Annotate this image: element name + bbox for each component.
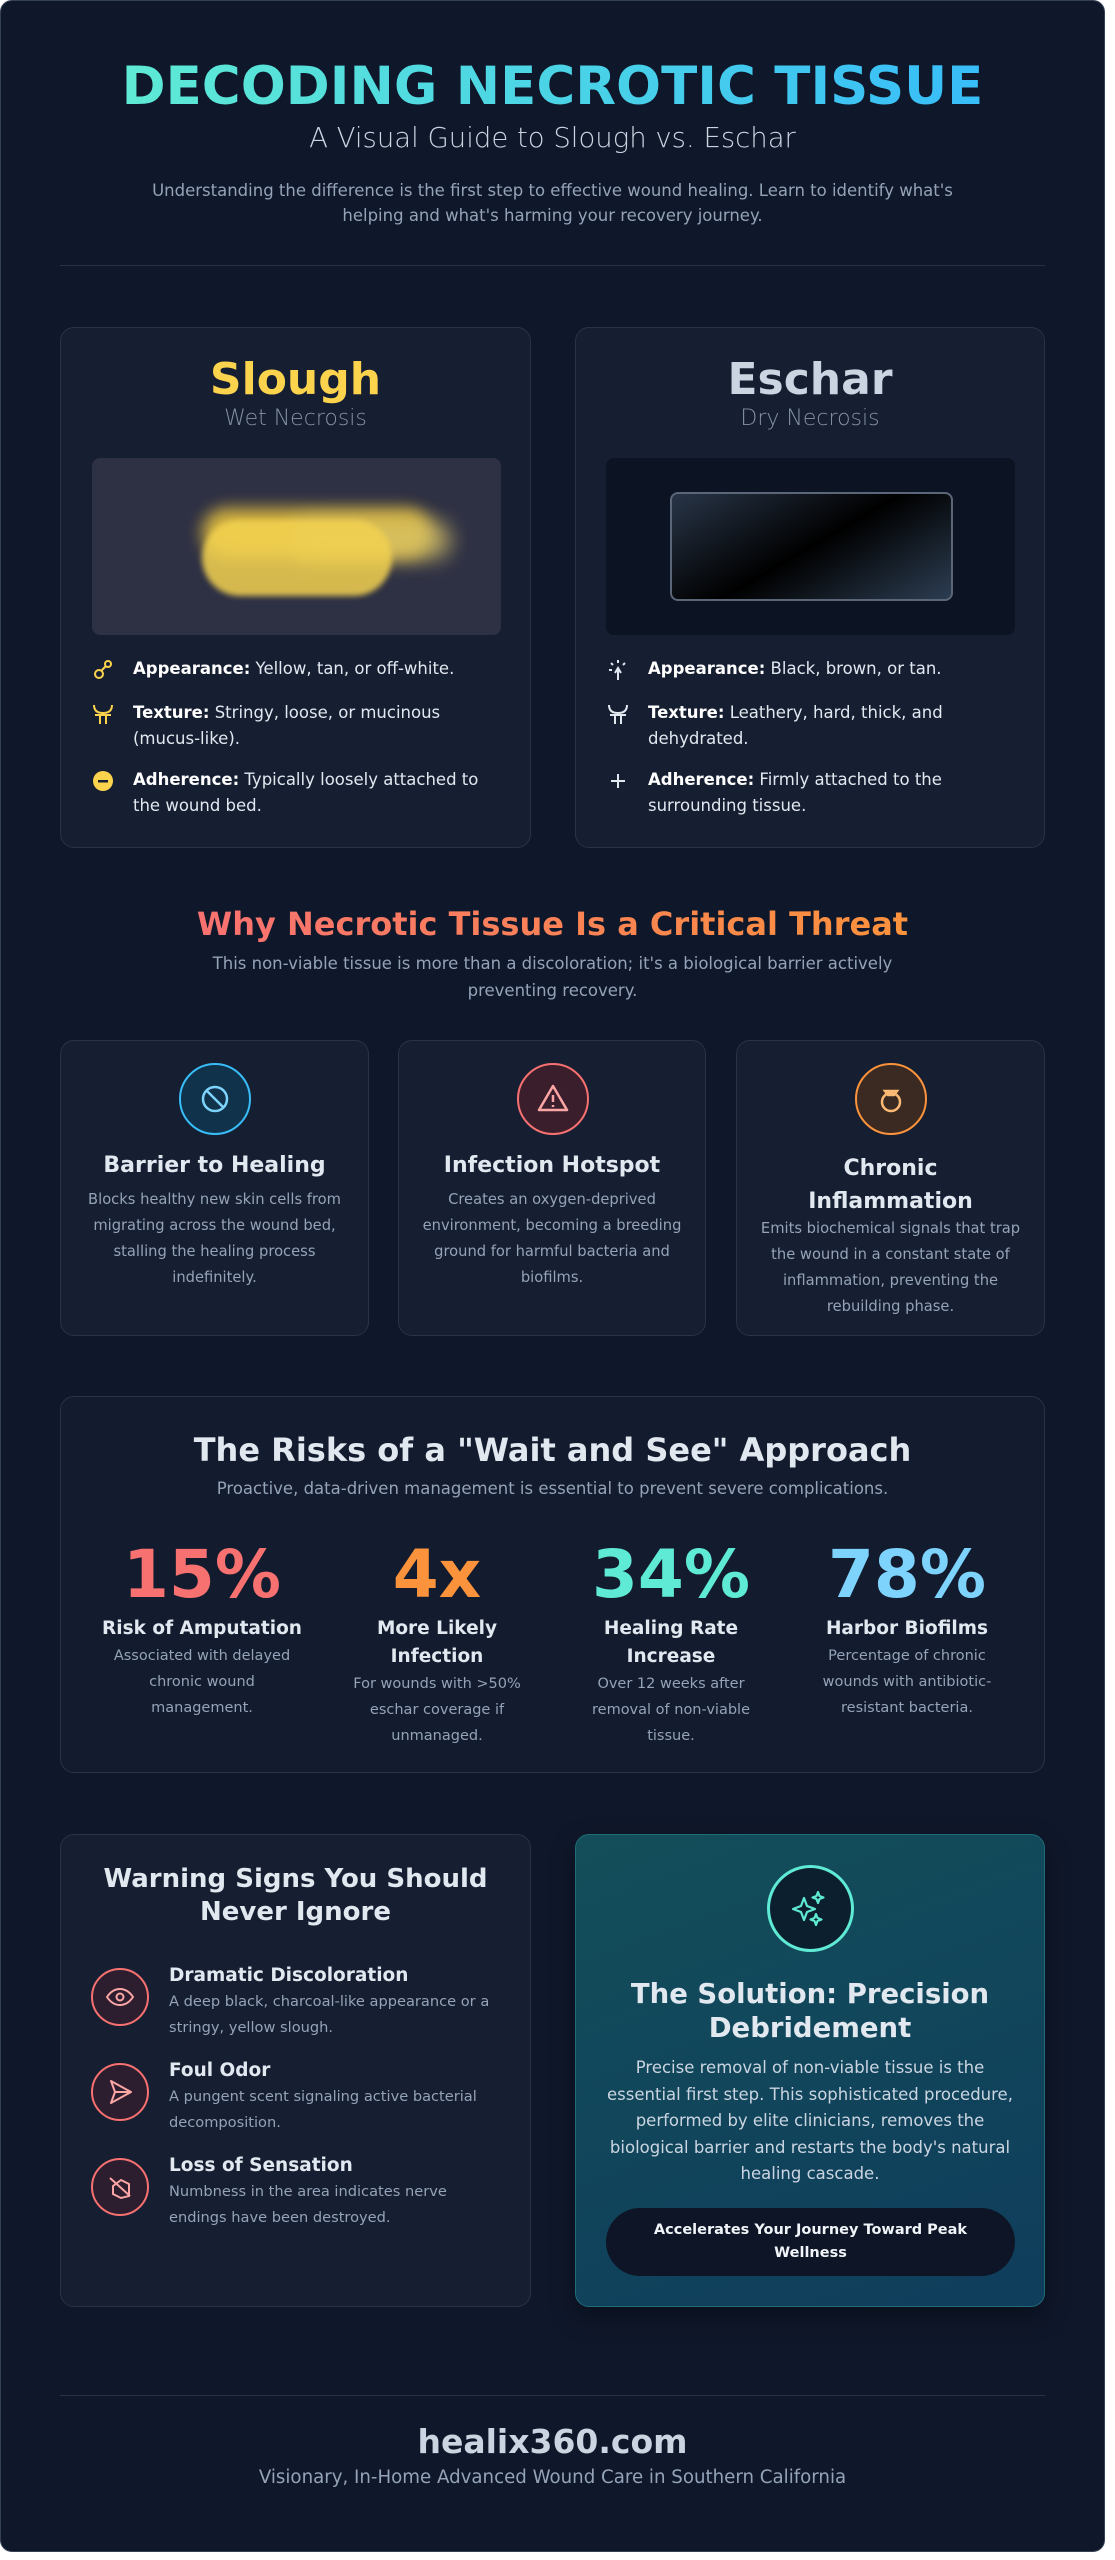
subheading: wet necrosis: Wet Necrosis [224,406,367,431]
risks heading: The Risks of a "Wait and See" Approach [194,1431,911,1469]
panel: slough [60,327,531,848]
icon: blocked [179,1063,251,1135]
warning heading: Never Ignore [200,1897,391,1927]
icon: flame [855,1063,927,1135]
card text: Emits biochemical signals that trap the wound in a constant state of inflammation, preventing the rebuilding phase. [761,1220,1020,1315]
stat: 34% [592,1536,750,1744]
sign: discoloration: Dramatic Discoloration [169,1965,408,1986]
illustration: eschar [606,458,1015,635]
item: texture: Texture: Leathery, hard, thick, and dehydrated. [648,703,943,748]
subheading: dry necrosis: Dry Necrosis [740,406,880,431]
panel: infection hotspot [398,1040,706,1336]
panel: chronic inflammation [736,1040,1045,1336]
warning heading: Warning Signs You Should [104,1864,488,1894]
card title: Chronic [843,1156,938,1181]
card text: Creates an oxygen-deprived environment, becoming a breeding ground for harmful bacteria and biofilms. [423,1191,681,1286]
heading: critical threat: Why Necrotic Tissue Is a Critical Threat [197,905,908,943]
item: adherence: Adherence: Typically loosely attached to the wound bed. [133,770,478,815]
panel: warning signs [60,1834,531,2307]
sign: foul odor: Foul Odor [169,2060,270,2081]
stat: 15% [102,1536,302,1716]
stat: 4x: 4x [393,1536,481,1613]
sign: foul odor: A pungent scent signaling active bacterial decomposition. [169,2088,477,2131]
intro text: Understanding the difference is the first step to effective wound healing. Learn to identify what's helping and what's harming your recovery journey. [152,181,953,225]
title: DECODING NECROTIC TISSUE [122,56,983,117]
stat: 34%: 34% [592,1536,750,1613]
threat subtitle: This non-viable tissue is more than a discoloration; it's a biological barrier actively preventing recovery. [213,954,892,1000]
button: accelerates [606,2208,1015,2276]
sign: loss of sensation: Numbness in the area indicates nerve endings have been destroyed. [169,2183,447,2226]
stat: 34%: Healing Rate Increase [604,1618,738,1667]
card title: Barrier to Healing [103,1153,326,1178]
sign: discoloration [91,1965,489,2036]
heading: eschar: Eschar [727,354,893,405]
solution heading: Debridement [709,2012,911,2044]
card title [808,1156,973,1214]
solution text: Precise removal of non-viable tissue is the essential first step. This sophisticated procedure, performed by elite clinicians, removes the biological barrier and restarts the body's natural healing cascade. [607,2058,1013,2183]
card title: Infection Hotspot [444,1153,660,1178]
stat: 78%: Percentage of chronic wounds with antibiotic-resistant bacteria. [823,1648,991,1716]
heading: slough: Slough [210,354,381,405]
sign: loss of sensation: Loss of Sensation [169,2155,353,2176]
item: texture: Texture: Stringy, loose, or mucinous (mucus-like). [133,703,440,748]
button: accelerates: Wellness [774,2245,847,2261]
stat: 15%: Risk of Amputation [102,1618,302,1639]
sign: foul odor [91,2060,477,2131]
panel: solution [575,1834,1045,2307]
solution heading: The Solution: Precision [631,1978,989,2010]
item: adherence: Adherence: Firmly attached to the surrounding tissue. [648,770,942,815]
stat: 15%: 15% [123,1536,281,1613]
panel: barrier to healing [60,1040,369,1336]
subtitle: A Visual Guide to Slough vs. Eschar [309,122,796,154]
risks subtitle: Proactive, data-driven management is essential to prevent severe complications. [217,1479,888,1498]
stat: 78% [823,1536,991,1716]
illustration: slough [92,458,501,635]
card text: Blocks healthy new skin cells from migrating across the wound bed, stalling the healing process indefinitely. [88,1191,341,1286]
panel: risks [60,1396,1045,1773]
sign: discoloration: A deep black, charcoal-like appearance or a stringy, yellow slough. [169,1993,489,2036]
solution heading [631,1978,989,2044]
stat: 4x [353,1536,521,1744]
stat: 15%: Associated with delayed chronic wound management. [114,1648,290,1716]
stat: 4x: For wounds with >50% eschar coverage if unmanaged. [353,1676,521,1744]
panel: eschar [575,327,1045,848]
button: accelerates: Accelerates Your Journey Toward Peak [654,2222,967,2238]
icon: sparkles [767,1865,854,1952]
stat: 78%: Harbor Biofilms [826,1618,988,1639]
sign: loss of sensation [91,2155,447,2226]
stat: 34%: Over 12 weeks after removal of non-viable tissue. [592,1676,750,1744]
footer brand: healix360.com [417,2422,688,2461]
item: appearance: Appearance: Yellow, tan, or off-white. [133,659,454,678]
stat: 78%: 78% [828,1536,986,1613]
warning heading [104,1864,488,1927]
card title: Inflammation [808,1189,973,1214]
item: appearance: Appearance: Black, brown, or tan. [648,659,942,678]
icon: warning [517,1063,589,1135]
footer tagline: Visionary, In-Home Advanced Wound Care in Southern California [259,2467,846,2488]
stat: 4x: More Likely Infection [377,1618,497,1667]
